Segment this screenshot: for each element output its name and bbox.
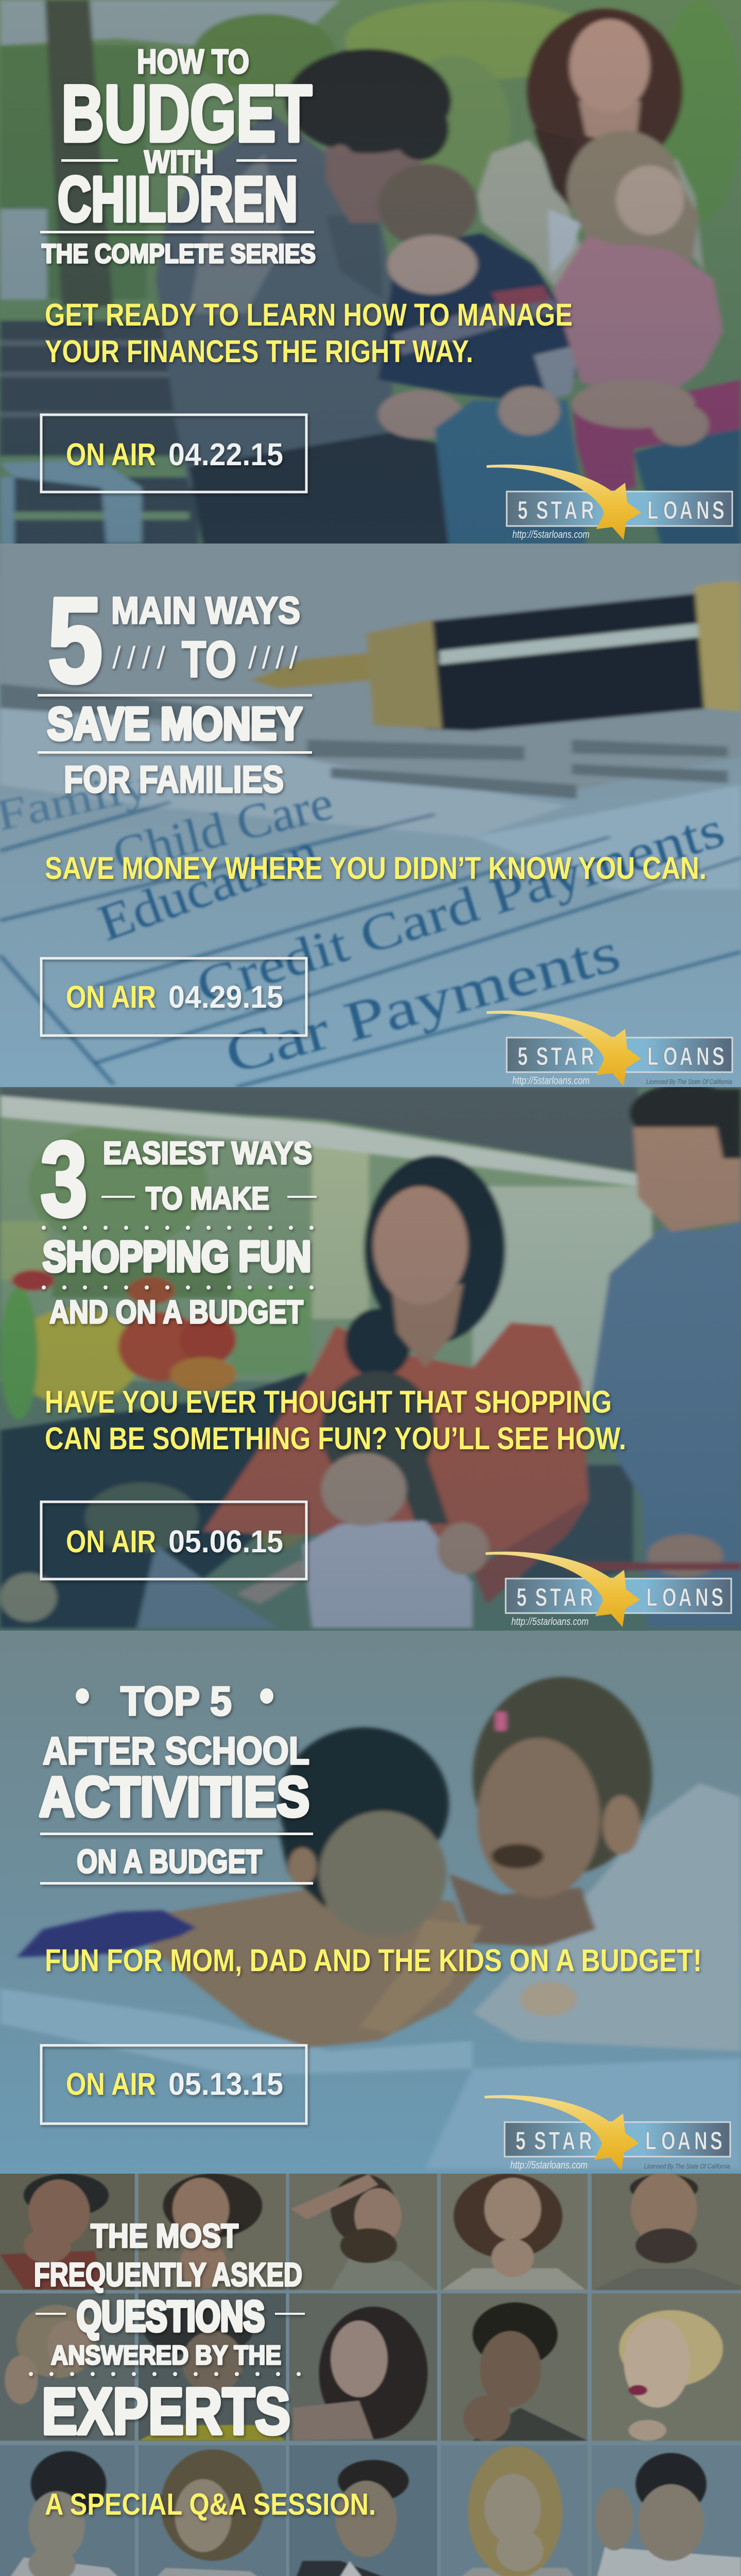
air date: 05.06.15 — [168, 1524, 283, 1559]
on air label: ON AIR — [66, 979, 156, 1014]
form text: car payments: Car Payments — [219, 920, 626, 1086]
on air date box — [41, 415, 306, 492]
heading line: top 5: TOP 5 — [120, 1678, 232, 1724]
logo: 5 star loans: 5STAR — [518, 496, 594, 524]
logo: 5 star loans: http://5starloans.com — [511, 1616, 589, 1628]
dotted divider — [44, 1285, 314, 1290]
logo: 5 star loans: 5STAR — [516, 1583, 593, 1612]
form text: education: Education — [91, 822, 325, 952]
heading line: the most: THE MOST — [91, 2217, 238, 2255]
air date: 05.13.15 — [168, 2066, 283, 2102]
panel: top 5 after school activities — [0, 1631, 741, 2174]
background photo: grid of thinking portraits — [0, 2173, 741, 2576]
panel: how to budget with children — [0, 0, 741, 557]
logo: 5 star loans — [485, 2095, 730, 2171]
heading line: easiest ways: EASIEST WAYS — [103, 1136, 312, 1171]
heading line: to: TO — [182, 631, 236, 688]
logo: 5 star loans: LOANS — [647, 496, 725, 524]
heading line: how to: HOW TO — [137, 42, 249, 80]
divider rule — [38, 751, 312, 754]
on air label: ON AIR — [66, 1524, 156, 1559]
logo: 5 star loans: LOANS — [647, 1042, 725, 1071]
heading line: main ways: MAIN WAYS — [111, 590, 300, 632]
background photo: budget form and pen — [0, 541, 741, 1087]
heading line: to make: TO MAKE — [146, 1181, 269, 1216]
heading line: budget: BUDGET — [61, 69, 312, 159]
description line 2: CAN BE SOMETHING FUN? YOU’LL SEE HOW. — [45, 1421, 626, 1456]
logo: 5 star loans: http://5starloans.com — [510, 2160, 588, 2171]
description text — [45, 1384, 626, 1456]
bullet right — [260, 1688, 273, 1704]
on air date box — [41, 1502, 306, 1579]
heading numeral 3: 3 — [40, 1120, 88, 1239]
dash right — [287, 1196, 317, 1198]
divider rule — [40, 1833, 313, 1835]
form text: family budget items — [0, 760, 731, 1086]
divider rule — [40, 1882, 313, 1885]
panel: 3 easiest ways to make shopping fun — [0, 1083, 741, 1631]
heading line: save money: SAVE MONEY — [47, 698, 302, 749]
dotted divider — [31, 2372, 302, 2376]
divider rule — [38, 694, 312, 697]
dash right — [275, 2313, 305, 2315]
background photo: family on a park bench — [0, 0, 741, 557]
logo: 5 star loans — [487, 465, 732, 540]
form text: child care: Child Care — [107, 775, 338, 882]
heading line: experts: EXPERTS — [42, 2375, 290, 2448]
slashes right: //// — [248, 640, 298, 675]
heading line: frequently asked: FREQUENTLY ASKED — [34, 2256, 302, 2293]
slashes left: //// — [112, 640, 165, 675]
logo: 5 star loans: 5STAR — [518, 1042, 594, 1071]
heading line: after school: AFTER SCHOOL — [43, 1729, 309, 1772]
divider dash left — [61, 159, 118, 162]
logo: 5 star loans: LOANS — [645, 2127, 722, 2155]
heading: top 5 after school activities on a budget — [39, 1678, 313, 1885]
heading line: with: WITH — [144, 144, 214, 179]
logo: 5 star loans — [486, 1552, 731, 1628]
on air date box — [41, 958, 306, 1036]
description line 1: HAVE YOU EVER THOUGHT THAT SHOPPING — [45, 1384, 612, 1419]
logo: 5 star loans — [487, 1011, 732, 1087]
on air label: ON AIR — [66, 437, 156, 472]
panel: most frequently asked questions — [0, 2173, 741, 2576]
heading line: children: CHILDREN — [58, 164, 298, 235]
description text: A SPECIAL Q&A SESSION. — [45, 2487, 376, 2521]
logo: 5 star loans: http://5starloans.com — [512, 529, 590, 540]
heading line: activities: ACTIVITIES — [39, 1766, 309, 1828]
heading line: for families: FOR FAMILIES — [64, 759, 284, 801]
heading: most frequently asked questions answered by the experts — [31, 2217, 305, 2448]
on air date box — [41, 2045, 306, 2124]
dash left — [101, 1196, 135, 1198]
description line 2: YOUR FINANCES THE RIGHT WAY. — [45, 334, 473, 369]
heading line: questions: QUESTIONS — [77, 2292, 265, 2340]
dash left — [36, 2313, 66, 2315]
heading: 3 easiest ways to make shopping fun — [40, 1120, 317, 1330]
logo: 5 star loans: http://5starloans.com — [512, 1075, 590, 1087]
description line 1: GET READY TO LEARN HOW TO MANAGE — [45, 297, 573, 332]
description text — [45, 297, 573, 369]
logo: 5 star loans: 5STAR — [515, 2127, 592, 2155]
heading line: on a budget: ON A BUDGET — [77, 1843, 262, 1880]
heading line: shopping fun: SHOPPING FUN — [43, 1232, 311, 1280]
background photo: children playing in water — [0, 1631, 741, 2174]
panel: 5 main ways to save money for families — [0, 541, 741, 1087]
background photo: family in produce aisle — [0, 1083, 741, 1631]
divider rule — [40, 231, 314, 233]
divider dash right — [236, 159, 297, 162]
heading line: and on a budget: AND ON A BUDGET — [49, 1294, 303, 1330]
dotted divider — [44, 1226, 314, 1230]
air date: 04.29.15 — [168, 979, 283, 1014]
heading: 5 main ways to save money for families — [38, 572, 312, 801]
heading numeral 5: 5 — [47, 572, 103, 708]
heading line: answered by the: ANSWERED BY THE — [51, 2341, 281, 2370]
bullet left — [76, 1688, 89, 1704]
air date: 04.22.15 — [168, 437, 283, 472]
logo: 5 star loans: LOANS — [646, 1583, 723, 1612]
on air label: ON AIR — [66, 2066, 156, 2102]
subheading: the complete series: THE COMPLETE SERIES — [42, 239, 316, 269]
form text: credit card payments: Credit Card Payments — [190, 800, 731, 1015]
heading: how to budget with children — [40, 42, 316, 269]
